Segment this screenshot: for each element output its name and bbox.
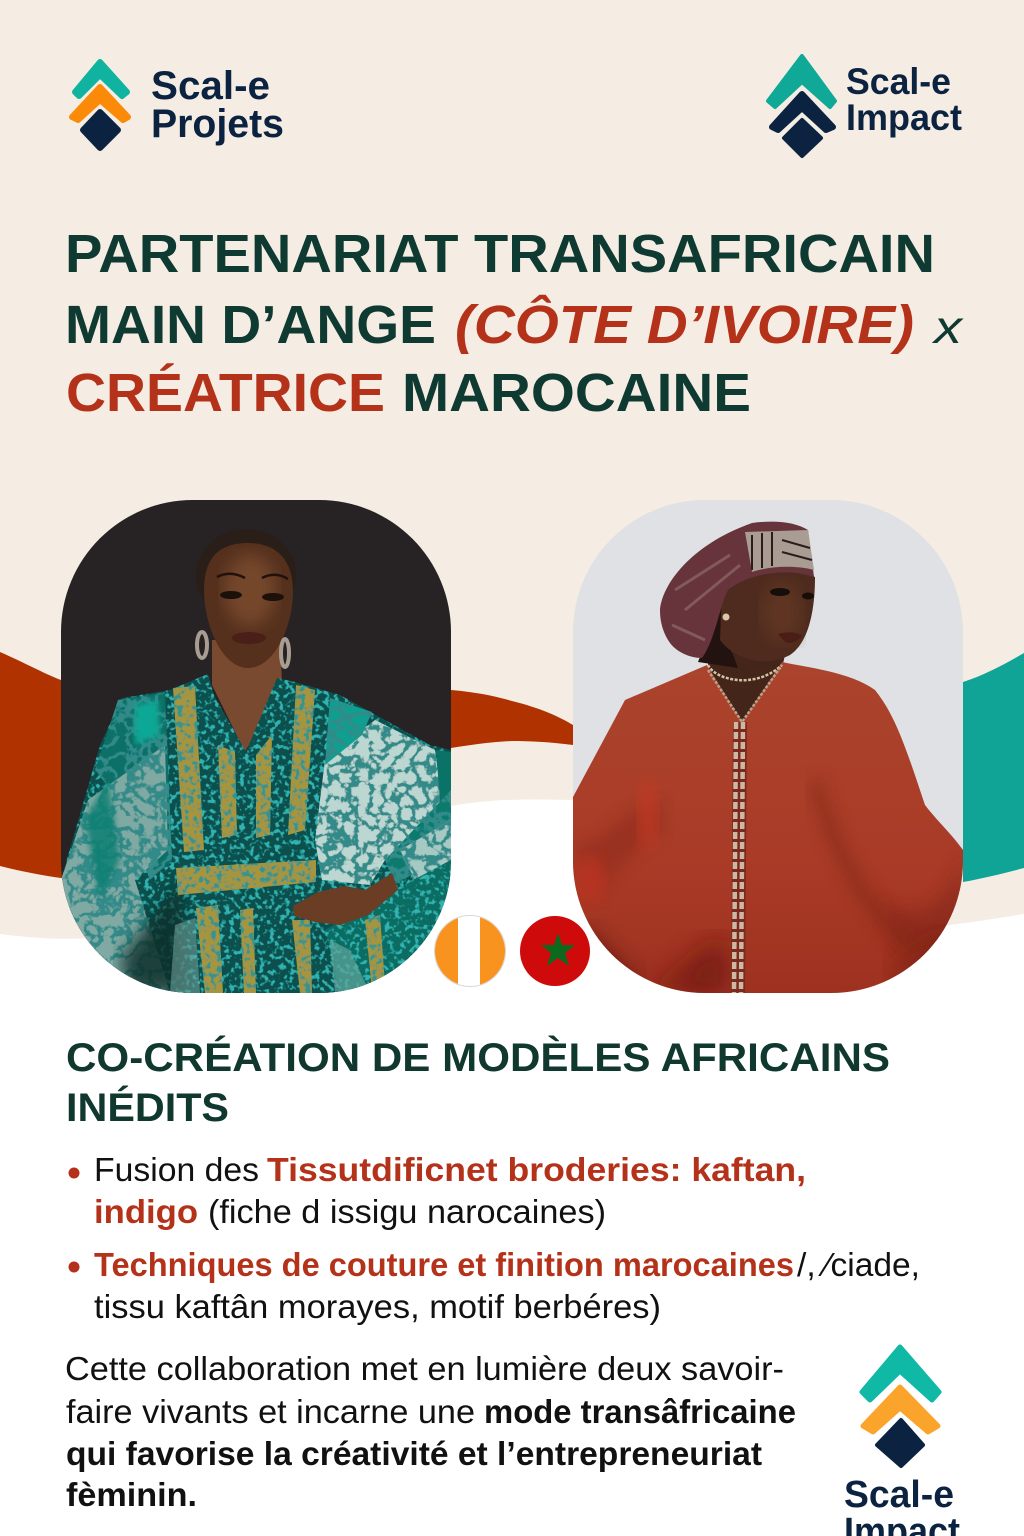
section heading: [66, 1035, 890, 1130]
bullet 2: /, ⁄ciade,: [797, 1246, 920, 1283]
bullet 1: indigo: [94, 1193, 198, 1230]
white lower area: [0, 800, 1024, 1536]
bullet 1: (fiche d issigu narocaines): [208, 1193, 606, 1230]
hair behind ear: [698, 607, 738, 668]
bullet 2: tissu kaftân morayes, motif berbéres): [94, 1288, 661, 1325]
neck: [708, 650, 785, 722]
skirt pale patches: [170, 918, 200, 993]
flag: Côte d'Ivoire: [434, 916, 506, 986]
logo: Scal-e Projets: [72, 62, 284, 148]
bullet 1: Fusion des: [94, 1151, 259, 1188]
title: (CÔTE D’IVOIRE): [455, 294, 914, 355]
bullet 2: Techniques de couture et finition marocaines: [94, 1246, 794, 1283]
left sleeve teal: [95, 692, 172, 880]
headscarf: [660, 522, 814, 658]
lower left dark fold: [120, 880, 190, 993]
closing paragraph: [65, 1350, 796, 1513]
title: MAROCAINE: [402, 363, 751, 423]
gold embroidered stripes: [173, 685, 385, 993]
logo: Scal-e Projets: Scal-e: [151, 64, 270, 108]
hair: [196, 529, 296, 600]
flag: Morocco: [520, 916, 590, 986]
closing paragraph: faire vivants et incarne une: [66, 1393, 475, 1430]
face: [720, 570, 815, 661]
bullet 2: [68, 1246, 920, 1325]
earrings: [197, 632, 207, 658]
photo: Ivorian designer in green embroidered kaftan: [61, 500, 451, 993]
closing paragraph: fèminin.: [66, 1476, 197, 1513]
closing paragraph: Cette collaboration met en lumière deux savoir-: [65, 1350, 784, 1387]
robe trim: [731, 722, 747, 993]
title: PARTENARIAT TRANSAFRICAIN: [65, 224, 935, 284]
bullet 1: [68, 1151, 806, 1230]
right sleeve white crumple: [315, 720, 442, 885]
section heading: INÉDITS: [66, 1085, 229, 1130]
logo: Scal-e Impact bottom right: [844, 1347, 960, 1536]
logo: Scal-e Impact bottom right: Scal-e: [844, 1474, 954, 1516]
section heading: CO-CRÉATION DE MODÈLES AFRICAINS: [66, 1035, 890, 1080]
title: x: [932, 301, 964, 353]
necklace: [708, 665, 782, 680]
robe folds: [578, 810, 663, 877]
closing paragraph: qui favorise la créativité et l’entrepreneuriat: [66, 1435, 762, 1472]
logo: Scal-e Projets: Projets: [151, 102, 284, 146]
title: MAIN D’ANGE: [65, 295, 436, 355]
left sleeve deep teal: [85, 780, 120, 900]
logo: Scal-e Impact top right: [768, 56, 962, 156]
bullet 1: Tissutdificnet broderies: kaftan,: [267, 1151, 806, 1188]
title: CRÉATRICE: [66, 363, 385, 423]
robe: [573, 662, 963, 993]
logo: Scal-e Impact top right: Scal-e: [846, 61, 951, 102]
face: [204, 543, 293, 668]
neck: [212, 640, 282, 752]
hand and forearm: [293, 873, 398, 925]
title: [65, 224, 964, 423]
photo: Moroccan designer in red robe: [573, 500, 963, 993]
red wave band: [0, 652, 573, 880]
left sleeve white crumple: [61, 745, 170, 993]
teal wave band: [963, 653, 1024, 882]
robe body: [61, 674, 451, 993]
closing paragraph: mode transâfricaine: [484, 1393, 796, 1430]
logo: Scal-e Impact top right: Impact: [846, 97, 962, 138]
